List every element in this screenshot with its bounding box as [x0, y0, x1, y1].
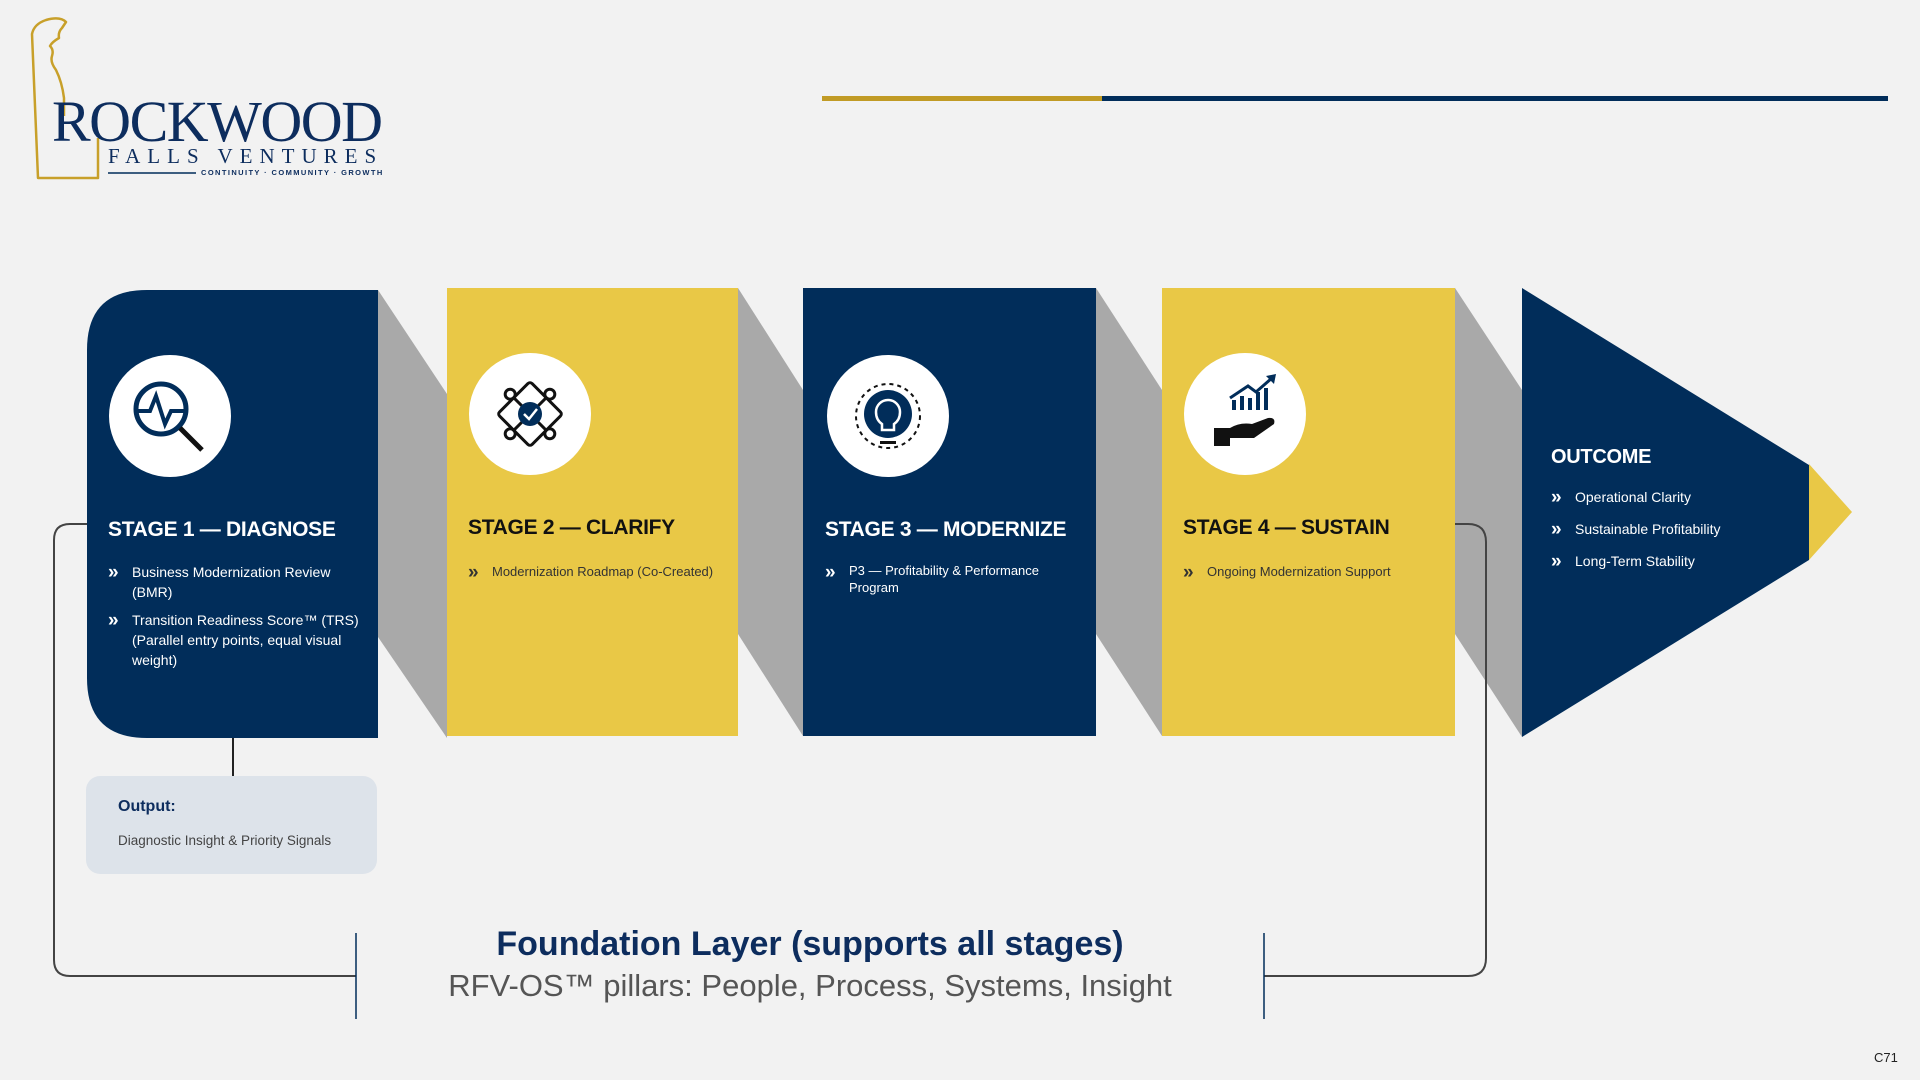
outcome text: [1551, 446, 1721, 569]
outcome arrow: [1522, 288, 1852, 737]
logo: CONTINUITY · COMMUNITY · GROWTH: [201, 168, 384, 177]
stage 3 text: [825, 518, 1066, 595]
foundation bracket right: [1264, 524, 1486, 976]
logo: ROCKWOOD: [52, 89, 382, 154]
icon: gear lightbulb: [856, 384, 920, 448]
stage 1 text: Transition Readiness Score™ (TRS) (Parallel entry points, equal visual weight): [132, 612, 359, 668]
outcome text: Long-Term Stability: [1575, 553, 1695, 569]
stage 2 text: [468, 516, 713, 579]
foundation bracket left: [54, 524, 356, 976]
stage 4 text: Ongoing Modernization Support: [1207, 564, 1391, 579]
connectors: [378, 288, 1522, 738]
stage 1 text: STAGE 1 — DIAGNOSE: [108, 518, 336, 541]
output box: Output:: [118, 798, 176, 815]
logo: FALLS VENTURES: [108, 144, 383, 168]
page code: C71: [1874, 1050, 1898, 1065]
stage 1 panel: [87, 290, 378, 738]
stage 4 panel: [1162, 288, 1455, 736]
output connector: [232, 738, 234, 776]
stage 1 text: [108, 518, 359, 668]
icon circles: [109, 353, 1306, 477]
output box: [86, 776, 377, 874]
foundation layer text: [448, 925, 1172, 1003]
stage 1 text: Business Modernization Review (BMR): [132, 564, 330, 600]
stage 2 text: Modernization Roadmap (Co-Created): [492, 564, 713, 579]
stage 2 panel: [447, 288, 738, 736]
outcome text: Sustainable Profitability: [1575, 521, 1721, 537]
foundation layer text: Foundation Layer (supports all stages): [496, 925, 1124, 963]
outcome text: Operational Clarity: [1575, 489, 1691, 505]
logo: [30, 17, 384, 180]
stage 2 text: STAGE 2 — CLARIFY: [468, 516, 675, 539]
top accent line: [822, 96, 1888, 101]
stage 3 text: STAGE 3 — MODERNIZE: [825, 518, 1066, 541]
stage 4 text: [1183, 516, 1391, 579]
icon: magnifier pulse: [136, 384, 202, 450]
icon: hand with chart: [1214, 374, 1276, 446]
foundation layer text: RFV-OS™ pillars: People, Process, Systems, Insight: [448, 968, 1172, 1003]
stage 3 text: P3 — Profitability & Performance Program: [849, 563, 1039, 595]
icon: puzzle: [483, 367, 577, 461]
output box: Diagnostic Insight & Priority Signals: [118, 833, 331, 848]
stage 3 panel: [803, 288, 1096, 736]
outcome text: OUTCOME: [1551, 446, 1651, 468]
stage 4 text: STAGE 4 — SUSTAIN: [1183, 516, 1389, 539]
